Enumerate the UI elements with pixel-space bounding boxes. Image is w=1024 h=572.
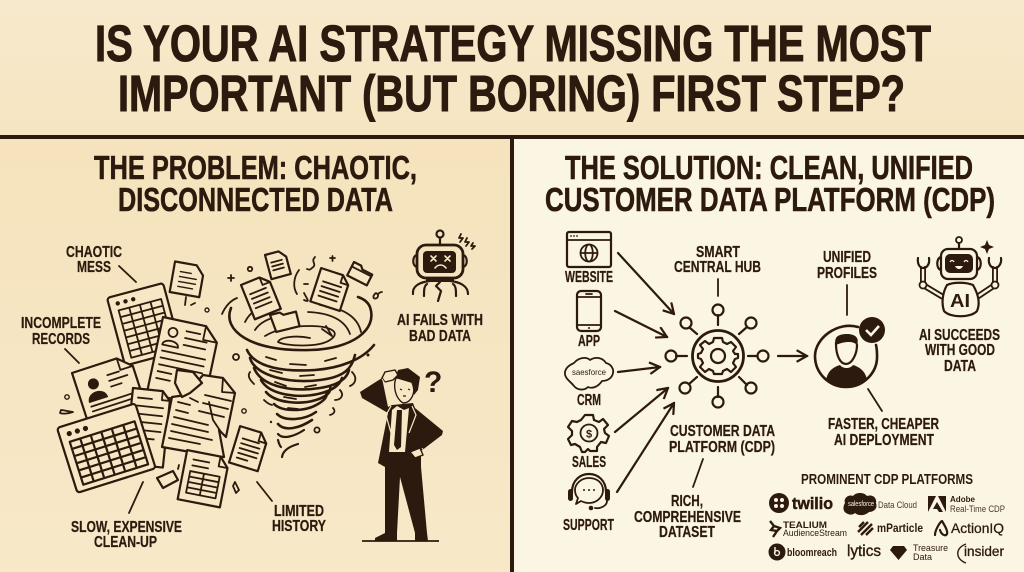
label: ai succeeds with good data: DATA bbox=[944, 358, 976, 375]
logo: tealium audiencestream: AudienceStream bbox=[783, 528, 847, 538]
logo: insider: insider bbox=[964, 544, 1004, 559]
label: rich, comprehensive dataset bbox=[634, 459, 741, 541]
label: ai fails with bad data bbox=[397, 312, 483, 345]
icon: loose folder bbox=[157, 471, 178, 488]
heading: the problem bbox=[94, 149, 417, 218]
arrow: support to hub bbox=[617, 403, 674, 492]
label: limited history: HISTORY bbox=[272, 518, 327, 535]
label: slow, expensive clean-up: CLEAN-UP bbox=[94, 534, 157, 551]
logo: salesforce data cloud: salesforce bbox=[848, 501, 874, 508]
label: faster, cheaper ai deployment: AI DEPLOYMENT bbox=[834, 432, 934, 449]
label: limited history bbox=[257, 482, 327, 535]
logo: salesforce data cloud bbox=[843, 493, 917, 515]
arrow: crm to hub bbox=[618, 367, 660, 372]
label: unified profiles bbox=[817, 249, 877, 315]
icon: confused man bbox=[360, 368, 443, 541]
logo: adobe real-time cdp: Adobe bbox=[950, 494, 975, 504]
heading: the problem: THE PROBLEM: CHAOTIC, bbox=[94, 149, 417, 186]
logo: treasure data: Data bbox=[913, 552, 932, 562]
heading: the solution bbox=[545, 149, 995, 218]
arrow: website to hub bbox=[618, 253, 674, 314]
panel: the solution bbox=[545, 149, 1005, 563]
icon: right document bbox=[229, 426, 269, 471]
icon: sales gear: $ bbox=[586, 428, 592, 440]
label: incomplete records bbox=[21, 315, 101, 363]
icon: central hub bbox=[666, 304, 768, 408]
logo: actioniq: ActionIQ bbox=[951, 520, 1004, 536]
icon: flying document left bbox=[241, 275, 281, 319]
logo: treasure data: Treasure bbox=[913, 543, 948, 553]
label: ai fails with bad data: BAD DATA bbox=[409, 328, 471, 345]
icon: crm cloud: CRM bbox=[577, 392, 601, 409]
icon: app: APP bbox=[578, 333, 600, 350]
logo: mparticle: mParticle bbox=[877, 521, 923, 535]
label: customer data platform: CUSTOMER DATA bbox=[670, 423, 775, 440]
icon: support headset bbox=[563, 474, 614, 534]
icon: torn document bbox=[162, 370, 235, 457]
icon: unified profile bbox=[815, 317, 885, 388]
label: incomplete records: INCOMPLETE bbox=[21, 315, 101, 332]
logo: lytics: lytics bbox=[847, 543, 881, 560]
label: customer data platform: PLATFORM (CDP) bbox=[669, 439, 775, 456]
label: slow, expensive clean-up bbox=[71, 482, 182, 551]
label: customer data platform bbox=[669, 423, 775, 456]
label: ai succeeds with good data bbox=[919, 327, 1000, 375]
label: ai succeeds with good data: AI SUCCEEDS bbox=[919, 327, 1000, 344]
arrow: app to hub bbox=[615, 311, 667, 337]
logo: insider bbox=[958, 544, 1004, 563]
icon: flying folder centre bbox=[270, 309, 300, 332]
icon: top spreadsheet bbox=[107, 283, 181, 366]
label: smart central hub bbox=[674, 244, 761, 296]
label: chaotic mess: MESS bbox=[77, 259, 111, 276]
icon: happy robot: AI bbox=[950, 291, 970, 311]
icon: sales gear: SALES bbox=[572, 454, 606, 471]
label: ai fails with bad data: AI FAILS WITH bbox=[397, 312, 483, 329]
icon: crm cloud bbox=[565, 358, 613, 409]
icon: website bbox=[565, 232, 613, 286]
icon: website: WEBSITE bbox=[565, 269, 613, 286]
label: limited history: LIMITED bbox=[274, 503, 324, 520]
arrow: hub to profile bbox=[778, 355, 807, 357]
icon: profile document bbox=[147, 317, 220, 405]
logo: tealium audiencestream bbox=[770, 520, 847, 538]
label: rich, comprehensive dataset: COMPREHENSIVE bbox=[634, 509, 741, 526]
label: rich, comprehensive dataset: DATASET bbox=[659, 524, 715, 541]
label: incomplete records: RECORDS bbox=[32, 331, 90, 348]
label: ai succeeds with good data: WITH GOOD bbox=[925, 342, 995, 359]
icon: crm cloud: saesforce bbox=[572, 367, 606, 377]
label: faster, cheaper ai deployment: FASTER, CHEAPER bbox=[828, 416, 939, 433]
icon: happy robot bbox=[918, 237, 1001, 316]
label: unified profiles: PROFILES bbox=[817, 265, 877, 282]
title bbox=[95, 15, 931, 122]
icon: small top document bbox=[170, 261, 205, 297]
label: slow, expensive clean-up: SLOW, EXPENSIVE bbox=[71, 519, 182, 536]
logo: adobe real-time cdp bbox=[928, 494, 1005, 514]
icon: support headset: SUPPORT bbox=[563, 517, 614, 534]
logo: salesforce data cloud: Data Cloud bbox=[878, 500, 917, 511]
icon: data tornado bbox=[222, 250, 382, 457]
label: faster, cheaper ai deployment bbox=[828, 389, 939, 449]
panel: the problem bbox=[21, 149, 483, 551]
label: rich, comprehensive dataset: RICH, bbox=[671, 493, 703, 510]
icon: scattered documents bbox=[57, 261, 269, 507]
heading: prominent cdp platforms: PROMINENT CDP PLATFORMS bbox=[801, 472, 973, 488]
label: smart central hub: CENTRAL HUB bbox=[674, 259, 761, 276]
icon: table document bbox=[178, 450, 229, 507]
icon: failing robot bbox=[413, 230, 475, 301]
logo: twilio bbox=[769, 493, 833, 513]
icon: flying folder top bbox=[347, 262, 374, 285]
logo: bloomreach bbox=[768, 544, 837, 560]
icon: flying document right bbox=[310, 268, 351, 311]
arrow: sales to hub bbox=[615, 388, 668, 432]
logo: bloomreach: bloomreach bbox=[787, 547, 837, 559]
label: chaotic mess: CHAOTIC bbox=[66, 244, 122, 261]
heading: the problem: DISCONNECTED DATA bbox=[118, 181, 393, 218]
icon: lower spreadsheet bbox=[57, 403, 156, 493]
panel: prominent cdp platforms bbox=[768, 472, 1005, 563]
icon: sales gear bbox=[568, 415, 609, 471]
logo: adobe real-time cdp: Real-Time CDP bbox=[950, 504, 1005, 514]
icon: app bbox=[577, 291, 601, 350]
label: unified profiles: UNIFIED bbox=[823, 249, 871, 266]
logo: mparticle bbox=[858, 521, 923, 535]
label: chaotic mess bbox=[66, 244, 136, 282]
logo: twilio: twilio bbox=[792, 494, 833, 513]
icon: question mark: ? bbox=[424, 366, 442, 399]
logo: tealium audiencestream: TEALIUM bbox=[783, 520, 827, 530]
logo: treasure data bbox=[890, 543, 948, 562]
icon: flying document top bbox=[265, 250, 291, 279]
label: smart central hub: SMART bbox=[696, 244, 740, 261]
icon: incomplete record card bbox=[72, 354, 145, 421]
icon: middle document bbox=[125, 388, 171, 468]
